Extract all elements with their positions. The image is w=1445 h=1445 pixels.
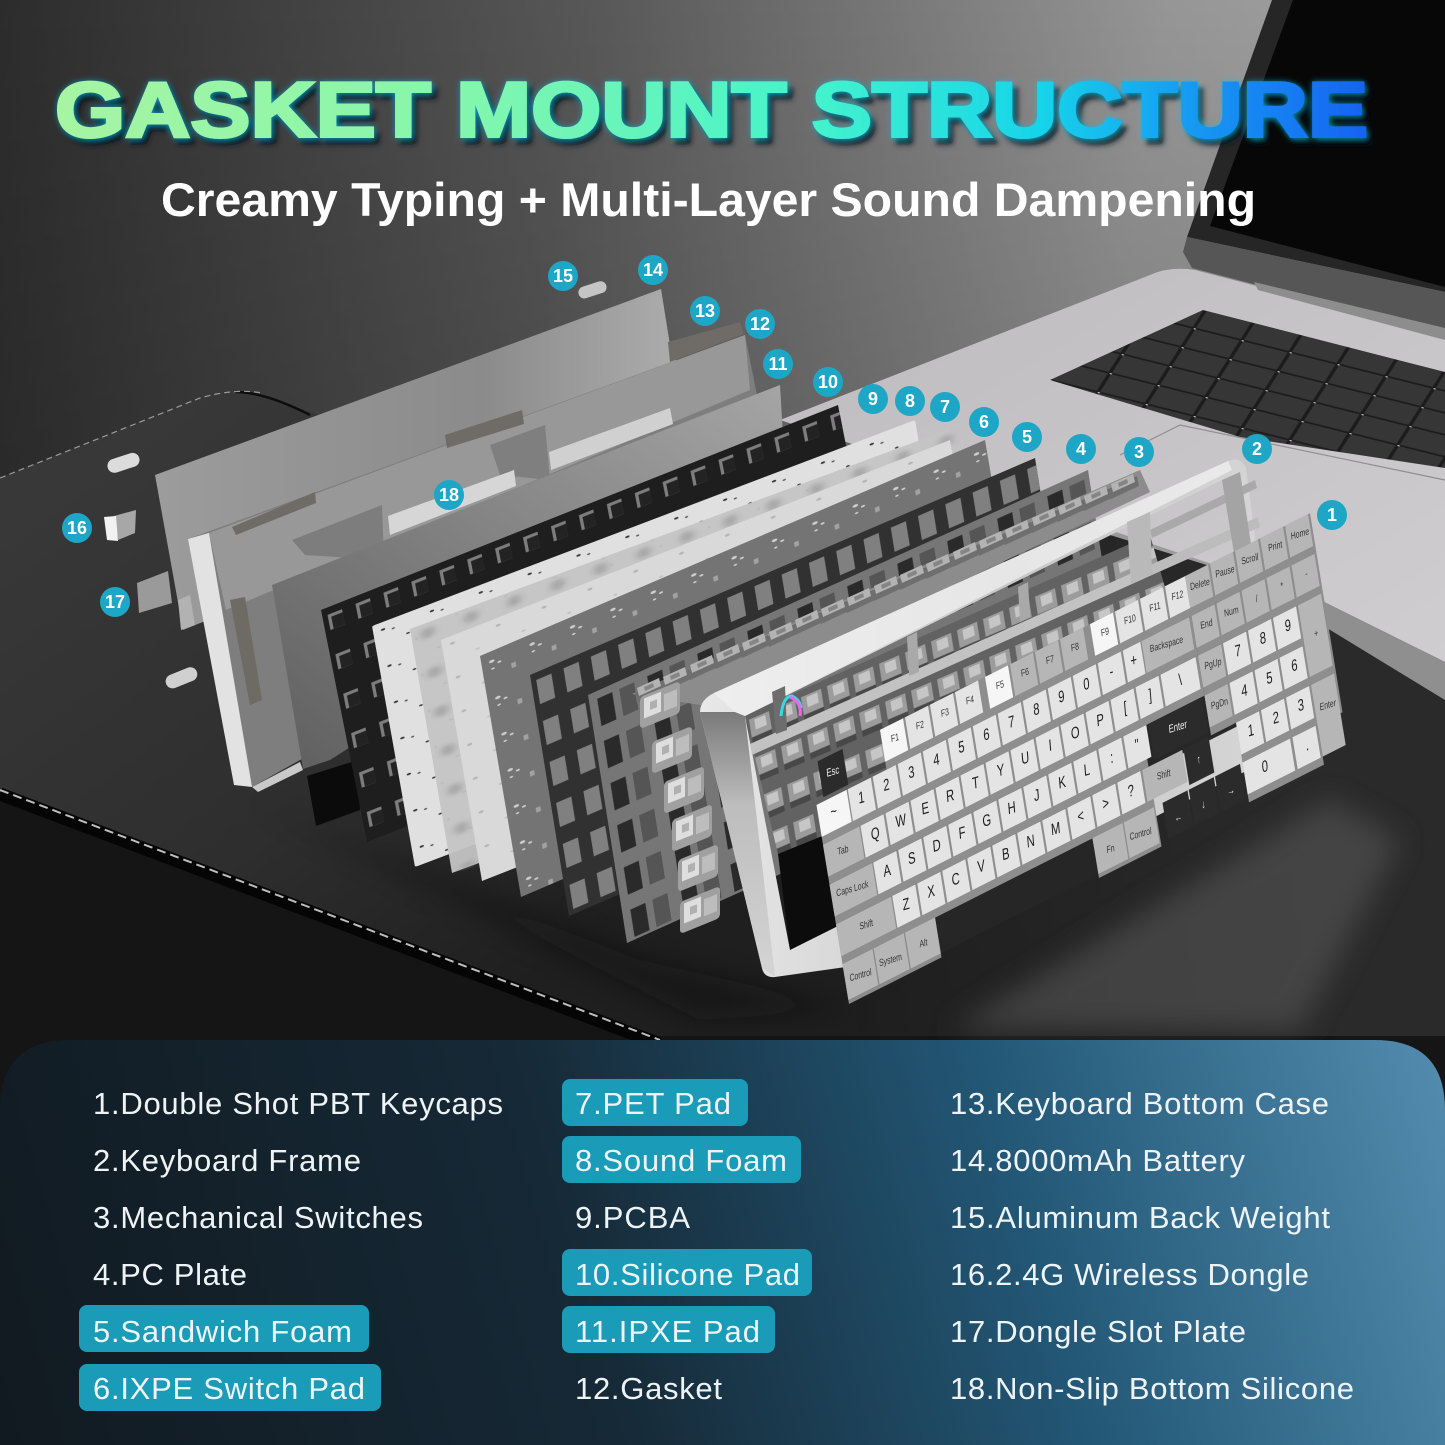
number row: 9 bbox=[1058, 686, 1065, 706]
column 2: 7.PET Pad bbox=[575, 1086, 731, 1121]
column 2: 8.Sound Foam bbox=[575, 1143, 787, 1178]
number row: * bbox=[1280, 579, 1284, 592]
QWERTY row: T bbox=[971, 772, 980, 793]
function row: Scroll bbox=[1241, 550, 1259, 567]
layer 4: PC plate bbox=[588, 470, 1127, 943]
column 2 bbox=[562, 1079, 812, 1406]
shift row: Z bbox=[902, 893, 910, 914]
number badges: 16 bbox=[67, 518, 87, 538]
number row: 2 bbox=[883, 774, 890, 795]
number badges: 1 bbox=[1327, 505, 1337, 525]
function row: F2 bbox=[916, 718, 924, 732]
laptop base bbox=[780, 269, 1445, 662]
home row: : bbox=[1109, 747, 1114, 767]
QWERTY row: Y bbox=[996, 759, 1006, 780]
number row: Num bbox=[1224, 603, 1239, 619]
function row: F4 bbox=[966, 693, 974, 707]
number row: 3 bbox=[908, 762, 915, 782]
number badges: 12 bbox=[750, 314, 770, 334]
laptop keyboard bbox=[1050, 310, 1445, 468]
laptop bbox=[780, 0, 1445, 700]
home row: L bbox=[1083, 759, 1091, 780]
number badges bbox=[62, 255, 1347, 617]
shift row: ? bbox=[1127, 780, 1135, 801]
column 2: 10.Silicone Pad bbox=[575, 1257, 800, 1292]
back weight left top bbox=[106, 451, 141, 475]
column 1: 2.Keyboard Frame bbox=[93, 1143, 361, 1178]
bottom row: Control bbox=[1129, 825, 1152, 843]
function row: F9 bbox=[1101, 625, 1109, 639]
silicone pad right bbox=[549, 408, 673, 470]
QWERTY row: R bbox=[945, 785, 955, 806]
home row: 6 bbox=[1291, 655, 1298, 675]
column 2: 9.PCBA bbox=[575, 1200, 690, 1235]
home row: Caps Lock bbox=[836, 878, 869, 899]
laptop front edge bbox=[1320, 600, 1445, 700]
number badges: 13 bbox=[695, 301, 715, 321]
home row: F bbox=[958, 822, 966, 843]
QWERTY row: 7 bbox=[1234, 640, 1242, 660]
number badges: 14 bbox=[643, 260, 663, 280]
home row: D bbox=[932, 835, 941, 856]
QWERTY row: [ bbox=[1123, 697, 1128, 717]
number row: End bbox=[1200, 616, 1213, 631]
column 1: 1.Double Shot PBT Keycaps bbox=[93, 1086, 503, 1121]
home row: 5 bbox=[1266, 667, 1273, 688]
bottom row: ← bbox=[1174, 810, 1183, 825]
number badges: 2 bbox=[1252, 439, 1262, 459]
layer 12: gasket sheet bbox=[272, 385, 785, 769]
function row: F11 bbox=[1149, 599, 1161, 614]
number row: 8 bbox=[1033, 699, 1040, 719]
desk under panel bbox=[0, 790, 1445, 1445]
QWERTY row: 8 bbox=[1259, 628, 1267, 648]
function row: F5 bbox=[996, 678, 1004, 692]
number row: 5 bbox=[958, 736, 965, 757]
QWERTY row: O bbox=[1070, 722, 1080, 743]
QWERTY row: Tab bbox=[837, 843, 849, 857]
shift row: C bbox=[951, 868, 960, 889]
function row: F10 bbox=[1124, 612, 1136, 627]
layer 3: mechanical switches top row bbox=[632, 470, 1150, 705]
home row: K bbox=[1058, 771, 1067, 792]
home row bbox=[830, 646, 1308, 920]
layer 3: mechanical switches left column bbox=[640, 681, 720, 934]
wireless dongle bbox=[104, 510, 136, 541]
panel: parts list bbox=[0, 1040, 1445, 1445]
number row: Backspace bbox=[1149, 633, 1184, 654]
home row: H bbox=[1007, 797, 1016, 818]
number row: 1 bbox=[858, 787, 865, 807]
number badges: 17 bbox=[105, 592, 125, 612]
number row: / bbox=[1255, 592, 1259, 604]
number badges: 9 bbox=[868, 389, 878, 409]
bottom row: Fn bbox=[1106, 842, 1115, 856]
QWERTY row: ] bbox=[1148, 685, 1152, 704]
bottom row: . bbox=[1305, 735, 1309, 754]
QWERTY row bbox=[823, 594, 1333, 916]
QWERTY row: + bbox=[1314, 627, 1318, 639]
layer 5: sandwich foam bbox=[530, 458, 1074, 916]
QWERTY row: W bbox=[895, 809, 907, 831]
laptop hinge bbox=[1254, 282, 1445, 340]
number badges: 4 bbox=[1076, 439, 1086, 459]
shift row: X bbox=[927, 881, 936, 901]
bottom row: Alt bbox=[919, 936, 928, 950]
function row: F3 bbox=[941, 705, 949, 719]
home row: Enter bbox=[1168, 718, 1188, 736]
column 3 bbox=[950, 1086, 1354, 1406]
number row: 7 bbox=[1008, 711, 1015, 732]
number badges: 8 bbox=[905, 391, 915, 411]
function row: F6 bbox=[1021, 665, 1029, 679]
switches seen through the frame bbox=[745, 535, 1180, 900]
mat edge with stitching bbox=[0, 391, 660, 1044]
function row: F1 bbox=[891, 731, 899, 745]
function row: Esc bbox=[826, 764, 840, 780]
column 3: 16.2.4G Wireless Dongle bbox=[950, 1257, 1309, 1292]
function row: Home bbox=[1290, 525, 1310, 542]
QWERTY row: 9 bbox=[1284, 615, 1292, 635]
home row: PgDn bbox=[1210, 695, 1229, 712]
QWERTY row: P bbox=[1096, 709, 1105, 730]
home row: G bbox=[982, 810, 992, 830]
column 1 bbox=[79, 1086, 503, 1411]
laptop screen lid bbox=[1183, 0, 1445, 340]
silicone pad 18 bbox=[388, 470, 516, 535]
layer 9: PCBA bbox=[372, 420, 958, 867]
home row: A bbox=[883, 860, 892, 880]
bottom row bbox=[842, 726, 1321, 1000]
number row: - bbox=[1109, 661, 1114, 681]
function row: F12 bbox=[1171, 588, 1184, 603]
column 3: 14.8000mAh Battery bbox=[950, 1143, 1246, 1178]
shift row: > bbox=[1102, 793, 1110, 813]
function row bbox=[818, 514, 1314, 797]
back weight left bottom bbox=[164, 665, 199, 690]
function row: F8 bbox=[1071, 640, 1079, 654]
bottom row: ↓ bbox=[1201, 798, 1206, 812]
number row bbox=[816, 554, 1320, 837]
home row: " bbox=[1134, 735, 1139, 754]
home row: 4 bbox=[1241, 680, 1248, 700]
layer 8: sound foam bbox=[410, 429, 992, 873]
function row: Delete bbox=[1190, 575, 1210, 593]
layer 1: keycaps bbox=[810, 513, 1349, 1004]
number row: + bbox=[1130, 650, 1138, 670]
shift row: Shift bbox=[1156, 767, 1171, 782]
column 3: 15.Aluminum Back Weight bbox=[950, 1200, 1330, 1235]
column 3: 17.Dongle Slot Plate bbox=[950, 1314, 1246, 1349]
column 1: 5.Sandwich Foam bbox=[93, 1314, 352, 1349]
number row: 6 bbox=[983, 724, 990, 744]
home row: J bbox=[1033, 785, 1040, 805]
number badges: 10 bbox=[818, 372, 838, 392]
number row: - bbox=[1305, 567, 1308, 579]
shift row: 3 bbox=[1297, 695, 1305, 715]
keycap bases bbox=[810, 513, 1349, 1004]
number badges: 6 bbox=[979, 412, 989, 432]
number row: 4 bbox=[933, 749, 940, 769]
column 1: 3.Mechanical Switches bbox=[93, 1200, 423, 1235]
layer 2: keyboard frame bbox=[700, 460, 1300, 977]
column 2: 12.Gasket bbox=[575, 1371, 722, 1406]
number badges: 15 bbox=[553, 266, 573, 286]
subtitle: Creamy Typing + Multi-Layer Sound Dampening bbox=[161, 173, 1256, 226]
number row: ~ bbox=[830, 801, 838, 821]
QWERTY row: E bbox=[921, 798, 930, 818]
function row: Pause bbox=[1215, 563, 1235, 580]
column 2: 11.IPXE Pad bbox=[575, 1314, 760, 1349]
layer 6: switch pad bbox=[480, 440, 1026, 897]
shift row: V bbox=[977, 855, 986, 876]
shift row: Enter bbox=[1319, 696, 1336, 713]
shift row: ↑ bbox=[1196, 753, 1201, 767]
shadow under exploded layers bbox=[250, 800, 860, 1020]
dark opening inside frame bbox=[778, 832, 849, 950]
shift row: N bbox=[1026, 831, 1035, 851]
number badges: 5 bbox=[1022, 427, 1032, 447]
logo on frame bbox=[781, 696, 801, 716]
column 3: 13.Keyboard Bottom Case bbox=[950, 1086, 1329, 1121]
keyboard reflection on desk bbox=[950, 800, 1400, 1030]
shift row: < bbox=[1077, 806, 1085, 826]
function row: Print bbox=[1268, 538, 1283, 554]
bottom row: → bbox=[1227, 784, 1235, 799]
home row: S bbox=[907, 847, 916, 868]
bottom row: System bbox=[879, 950, 902, 969]
title: GASKET MOUNT STRUCTURE bbox=[55, 66, 1368, 154]
layer 7: PET pad bbox=[441, 440, 991, 881]
QWERTY row: PgUp bbox=[1204, 655, 1222, 672]
shift row: Shift bbox=[859, 916, 874, 932]
desk surface bbox=[0, 470, 1445, 1040]
QWERTY row: Q bbox=[870, 823, 880, 844]
black shard below sheet bbox=[307, 760, 360, 826]
shift row: B bbox=[1001, 843, 1010, 864]
number badges: 7 bbox=[940, 397, 950, 417]
shift row: M bbox=[1050, 818, 1061, 839]
column 3: 18.Non-Slip Bottom Silicone bbox=[950, 1371, 1354, 1406]
background: darkening toward the desk bbox=[0, 0, 1445, 480]
space bar bbox=[935, 838, 1098, 953]
QWERTY row: \ bbox=[1178, 670, 1183, 689]
aluminum back weight bbox=[577, 280, 608, 300]
desk mat bbox=[0, 393, 1100, 1042]
trackpad outline bbox=[1120, 425, 1445, 480]
bottom row: 0 bbox=[1261, 756, 1269, 776]
shift row: 1 bbox=[1247, 720, 1255, 740]
number badges: 11 bbox=[768, 354, 788, 374]
QWERTY row: I bbox=[1048, 735, 1052, 755]
layer 13: bottom case bbox=[188, 322, 800, 792]
shift row bbox=[836, 673, 1346, 996]
shift row: 2 bbox=[1272, 707, 1280, 727]
QWERTY row: U bbox=[1020, 747, 1030, 768]
dongle slot plate bbox=[137, 571, 195, 630]
number row: 0 bbox=[1083, 673, 1090, 694]
number badges: 3 bbox=[1134, 442, 1144, 462]
number badges: 18 bbox=[439, 485, 459, 505]
layer 10: silicone pad bbox=[321, 405, 884, 842]
function row: F7 bbox=[1046, 653, 1054, 666]
layer 14: battery back plate bbox=[155, 289, 700, 630]
bottom row: Control bbox=[849, 966, 872, 984]
column 1: 6.IXPE Switch Pad bbox=[93, 1371, 365, 1406]
column 1: 4.PC Plate bbox=[93, 1257, 247, 1292]
